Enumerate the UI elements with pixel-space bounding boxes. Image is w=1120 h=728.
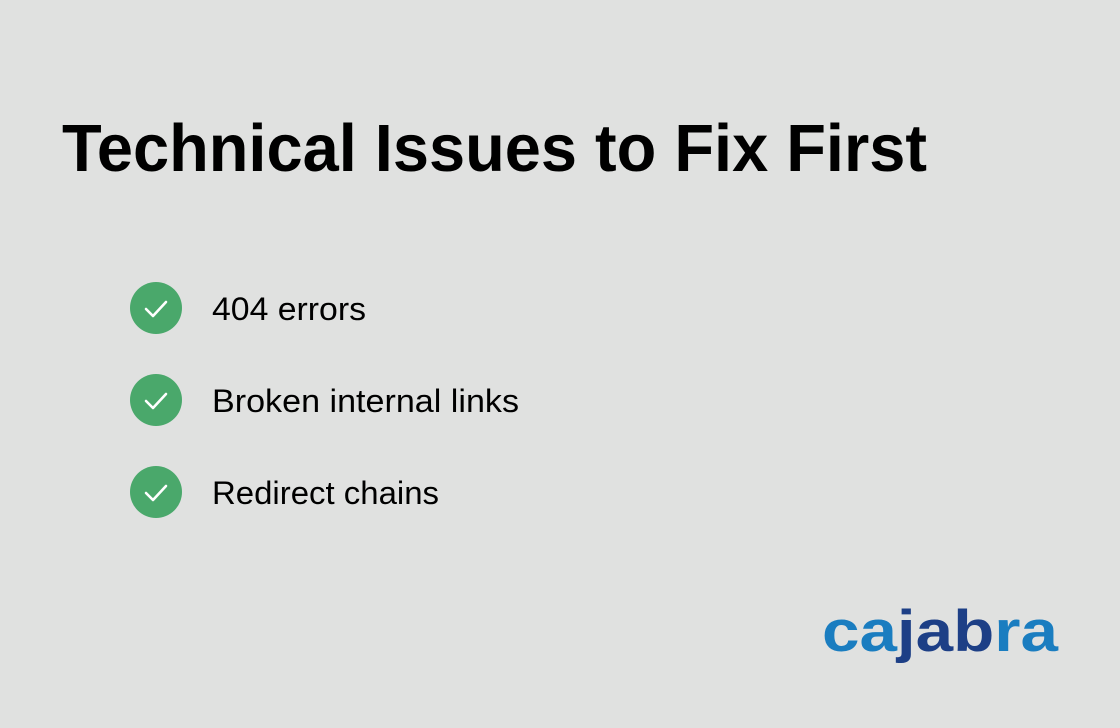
item: redirect chains [130,466,439,518]
item: broken internal links: Broken internal links [212,383,519,419]
item: redirect chains: Redirect chains [212,475,439,511]
checklist [130,282,519,518]
item: 404 errors: 404 errors [212,291,366,327]
item: 404 errors [130,282,366,334]
item: broken internal links [130,374,519,426]
logo: cajabra: cajabra [822,599,1059,664]
title: Technical Issues to Fix First [62,111,927,186]
